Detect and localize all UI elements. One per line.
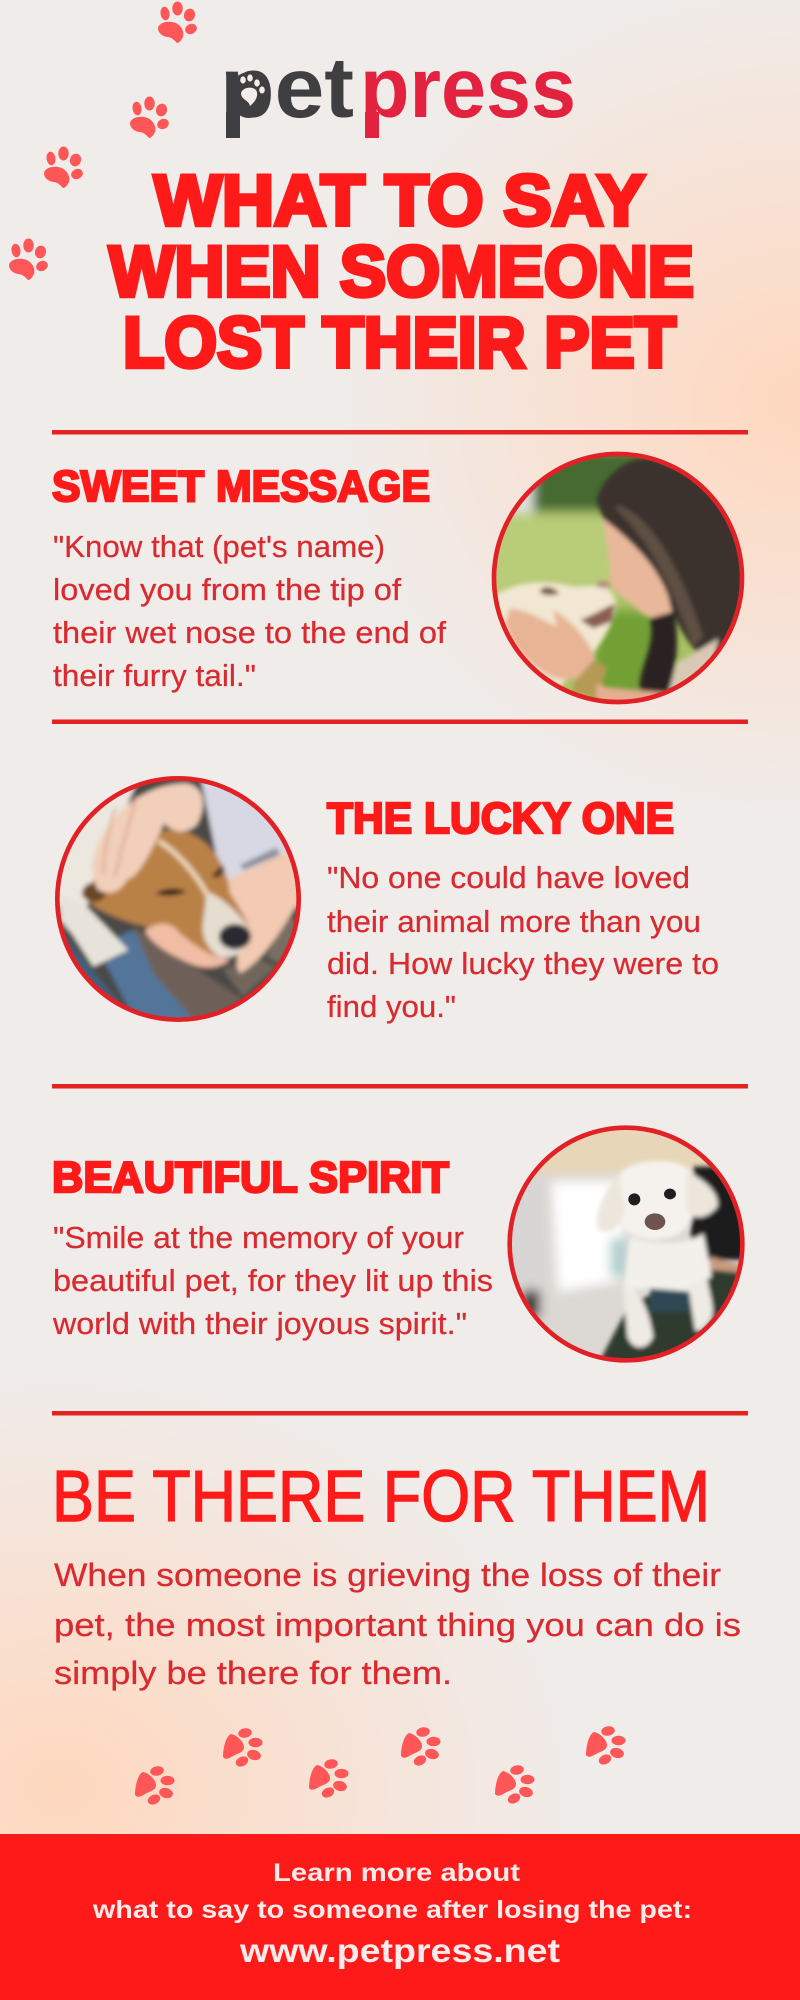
text block: be there for them: pet, the most important thing you can do is [54, 1607, 741, 1643]
logo: petpress: pet [220, 41, 354, 136]
text block: be there for them [54, 1557, 741, 1691]
divider line [52, 720, 748, 724]
heading: beautiful spirit: BEAUTIFUL SPIRIT [52, 1153, 449, 1202]
text block: be there for them: When someone is grieving the loss of their [54, 1557, 721, 1593]
text block: beautiful spirit: world with their joyous spirit." [52, 1306, 467, 1341]
title [109, 162, 694, 383]
divider line [52, 430, 748, 434]
text block: beautiful spirit: beautiful pet, for they lit up this [53, 1263, 493, 1298]
text block: the lucky one: find you." [327, 989, 456, 1024]
text block: sweet message: "Know that (pet's name) [53, 529, 385, 564]
footer text: www.petpress.net [239, 1932, 560, 1969]
text block: sweet message [53, 529, 446, 693]
heading: sweet message: SWEET MESSAGE [52, 462, 430, 511]
heading: the lucky one: THE LUCKY ONE [327, 794, 674, 843]
photo: woman and dog nose to nose [492, 452, 744, 704]
divider line [52, 1084, 748, 1088]
footer text: Learn more about [273, 1859, 521, 1887]
text block: be there for them: simply be there for them. [54, 1655, 452, 1691]
text block: beautiful spirit [52, 1220, 493, 1341]
footer text: what to say to someone after losing the pet: [92, 1896, 692, 1924]
title: WHEN SOMEONE [109, 233, 694, 312]
decorative paw prints top left [9, 2, 199, 280]
text block: sweet message: their wet nose to the end of [53, 615, 446, 650]
text block: the lucky one: did. How lucky they were to [327, 946, 719, 981]
footer text [92, 1859, 692, 1969]
text block: sweet message: their furry tail." [53, 658, 256, 693]
footer banner [0, 1834, 800, 2000]
heading: be there for them: BE THERE FOR THEM [52, 1457, 710, 1537]
photo: white fluffy dog held up [507, 1125, 745, 1363]
text block: the lucky one: their animal more than you [327, 904, 701, 939]
panel: beautiful spirit [52, 1120, 753, 1370]
text block: sweet message: loved you from the tip of [53, 572, 401, 607]
panel: be there for them [52, 1457, 741, 1691]
title: WHAT TO SAY [154, 162, 645, 241]
logo: petpress [220, 41, 576, 138]
text block: the lucky one [327, 860, 719, 1024]
decorative paw prints bottom [135, 1725, 626, 1807]
title: LOST THEIR PET [123, 304, 676, 383]
panel: sweet message [52, 452, 744, 704]
text block: beautiful spirit: "Smile at the memory of your [53, 1220, 464, 1255]
photo: dog being comforted by hands [50, 770, 307, 1027]
text block: the lucky one: "No one could have loved [327, 860, 690, 895]
logo: petpress: press [360, 41, 576, 136]
divider line [52, 1411, 748, 1416]
panel: the lucky one [50, 770, 719, 1027]
